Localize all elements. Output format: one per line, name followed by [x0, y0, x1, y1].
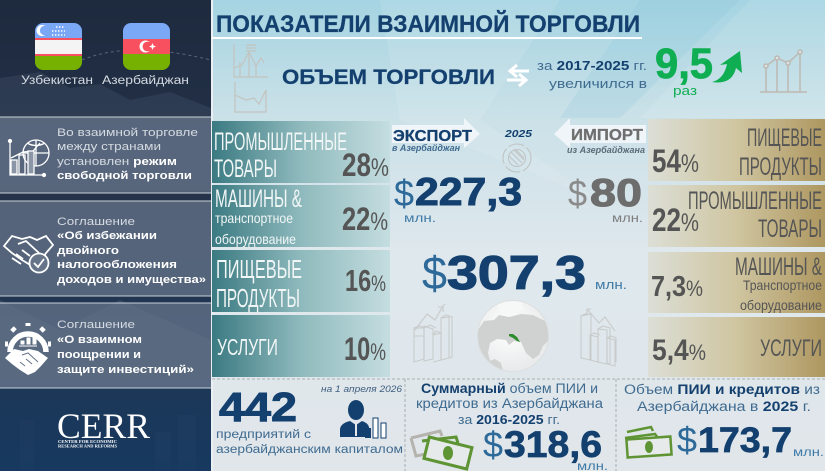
icon: globe with Uzbekistan highlighted [477, 300, 549, 372]
text: double taxation: Соглашение [57, 216, 135, 228]
row: services export: УСЛУГИ [217, 334, 278, 360]
row: industrial goods export: ТОВАРЫ [214, 155, 277, 183]
logo: CERR: RESEARCH AND REFORMS [58, 444, 117, 448]
label: Uzbekistan: Узбекистан [21, 75, 93, 87]
panel: free trade regime [0, 117, 211, 193]
text: investment protection: защите инвестиций» [57, 364, 194, 376]
text: free trade [57, 127, 198, 182]
panel: double taxation agreement [0, 201, 211, 296]
panel: FDI and loans in 2025: млн. [793, 445, 824, 459]
panel: FDI and loans in 2025: 173,7 [698, 421, 792, 460]
icon: rising bars [414, 304, 452, 362]
arrow: export: ЭКСПОРТ [393, 128, 472, 145]
row: industrial goods export [212, 121, 390, 183]
panel: total FDI and loans: за 2016-2025 гг. [458, 413, 560, 427]
icon: banknotes [411, 431, 472, 469]
text: double taxation: налогообложения [57, 259, 177, 271]
stat: import value: млн. [612, 211, 643, 225]
icon: gear and handshake [5, 323, 51, 375]
text: free trade: Во взаимной торговле [57, 127, 198, 139]
icon: falling bars [581, 309, 616, 366]
panel: total FDI and loans: Суммарный объем ПИИ и [421, 381, 598, 396]
row: food products export: ПРОДУКТЫ [216, 283, 300, 313]
stat: total trade value: $ [422, 247, 447, 299]
stat: export value: 227,3 [415, 171, 522, 214]
divider: bottom section [212, 379, 825, 471]
text: growth period [537, 58, 647, 91]
stat: export value: млн. [404, 211, 436, 225]
label: year 2025: 2025 [504, 128, 532, 140]
stat: 9.5 times: раз [673, 83, 697, 98]
logo: CERR: CERR [57, 406, 150, 446]
panel: investment protection agreement [0, 303, 211, 388]
row: food products import [648, 119, 825, 181]
row: food products export: 16% [345, 263, 386, 298]
panel: total FDI and loans: $ [483, 424, 503, 465]
logo: CERR: CENTER FOR ECONOMIC [58, 439, 117, 444]
arrow: import [554, 118, 646, 155]
left sidebar [0, 0, 213, 471]
text: investment protection [57, 319, 194, 376]
stat: import value: 80 [590, 172, 642, 215]
stat: export value: $ [394, 173, 414, 214]
row: machinery export [212, 185, 390, 247]
icon: handshake with check [4, 236, 53, 272]
main background [212, 0, 825, 471]
panel: FDI and loans in 2025: Азербайджана в 2025 г. [637, 399, 811, 414]
stat: import value: $ [568, 173, 587, 214]
row: food products import: 54% [652, 143, 699, 179]
stat: 9.5 times: 9,5 [655, 40, 713, 88]
text: double taxation: доходов и имущества» [57, 274, 206, 286]
icon: businessman with bars [340, 400, 386, 438]
stat: total trade value [422, 246, 627, 299]
row: industrial goods export: 28% [342, 147, 389, 183]
stat: total trade value: млн. [595, 278, 627, 292]
icon: globe with arrows [503, 144, 531, 172]
row: services import: 5,4% [652, 334, 706, 367]
title: ПОКАЗАТЕЛИ ВЗАИМНОЙ ТОРГОВЛИ [216, 10, 640, 38]
row: services export: 10% [344, 331, 386, 367]
label: Azerbaijan: Азербайджан [102, 75, 189, 87]
panel: enterprises: предприятий с [216, 429, 311, 441]
flag: Uzbekistan [35, 23, 82, 70]
text: free trade: установлен режим [57, 156, 177, 168]
arrow: export: в Азербайджан [392, 143, 461, 153]
row: industrial goods export: ПРОМЫШЛЕННЫЕ [214, 128, 347, 156]
text: investment protection: Соглашение [57, 319, 135, 331]
row: machinery export: транспортное [215, 210, 293, 226]
icon: faint line charts [234, 44, 268, 112]
panel: import categories [648, 119, 825, 377]
panel: enterprises [216, 384, 403, 456]
heading: trade volume: ОБЪЕМ ТОРГОВЛИ [282, 66, 495, 89]
row: industrial goods import: 22% [652, 202, 699, 238]
panel: FDI and loans in 2025: Объем ПИИ и кредитов из [624, 382, 820, 397]
row: services export [212, 315, 390, 377]
stat: export value [394, 171, 522, 225]
icon: swap arrows [507, 65, 529, 86]
row: machinery export: 22% [342, 201, 388, 237]
panel: enterprises: 442 [219, 384, 297, 430]
arrow: import: ИМПОРТ [571, 127, 643, 144]
icon: growth arrow [712, 51, 742, 82]
panel: enterprises: азербайджанским капиталом [216, 444, 403, 456]
arrow: export [392, 118, 480, 153]
row: machinery import: 7,3% [651, 271, 703, 303]
text: growth period: за 2017-2025 гг. [537, 58, 647, 73]
icon: line chart right [760, 50, 807, 92]
text: free trade: свободной торговли [57, 170, 192, 182]
panel: enterprises: на 1 апреля 2026 [321, 384, 403, 395]
icon: banknotes [625, 427, 672, 458]
panel: total FDI and loans: кредитов из Азербайджана [416, 396, 604, 411]
row: machinery export: МАШИНЫ & [215, 185, 302, 213]
arrow: import: из Азербайджана [567, 145, 645, 155]
panel: total FDI and loans [411, 381, 608, 471]
text: double taxation [57, 216, 206, 286]
row: services import [648, 317, 825, 377]
icon: globe chart [8, 140, 49, 176]
stat: import value [568, 172, 643, 225]
text: investment protection: поощрении и [57, 349, 141, 361]
text: double taxation: двойного [57, 245, 119, 257]
row: industrial goods import [648, 185, 825, 247]
text: investment protection: «О взаимном [57, 334, 142, 346]
text: double taxation: «Об избежании [57, 230, 157, 242]
row: machinery import [648, 252, 825, 313]
stat: 9.5 times [655, 40, 742, 98]
text: growth period: увеличился в [549, 76, 647, 91]
flag: Azerbaijan [123, 23, 170, 70]
row: food products export: ПИЩЕВЫЕ [216, 254, 302, 284]
panel: FDI and loans in 2025: $ [677, 421, 697, 460]
panel: export categories [212, 121, 390, 377]
row: machinery export: оборудование [215, 231, 296, 247]
panel: FDI and loans in 2025 [624, 382, 824, 460]
panel: total FDI and loans: 318,6 [504, 424, 602, 465]
row: food products export [212, 250, 390, 313]
text: free trade: между странами [57, 141, 161, 153]
stat: total trade value: 307,3 [447, 246, 586, 299]
